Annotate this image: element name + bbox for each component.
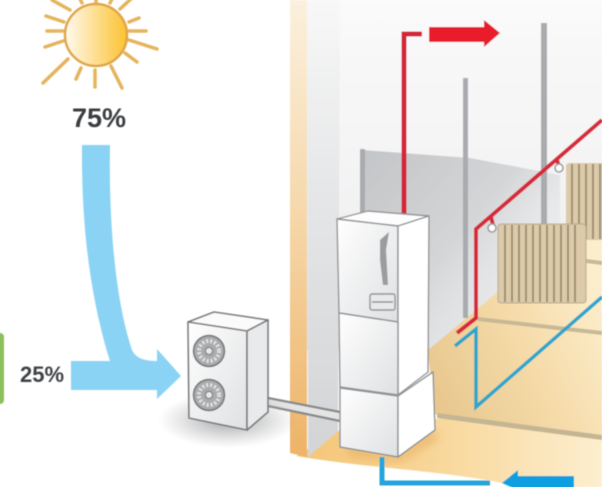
pipe: blue underfloor [382,457,490,483]
icon: sun [43,0,157,88]
indoor unit tank [337,211,435,457]
pipes: blue return loop [455,297,602,407]
label: 75%: 75% [72,103,126,133]
arrow: blue inflow [502,470,574,487]
upper floor room [428,205,602,437]
arrow: red outflow [429,20,500,47]
wall shadow [362,150,560,350]
pipes: connection to outdoor unit [268,398,340,421]
vertical wall posts [360,23,547,318]
back wall [307,0,602,350]
control panel [370,294,395,310]
pipe: red riser [404,34,422,215]
lower floor [296,400,602,487]
wall: exterior section [290,0,307,457]
arrow: light blue merged arrow [71,145,181,399]
wall: side face [307,0,340,457]
radiator valves [488,164,563,232]
radiator: upper [566,163,602,240]
floor shadow under tank [345,430,440,462]
radiator: lower [498,224,586,303]
outdoor unit [158,312,298,448]
fan: upper [194,336,224,366]
pipes: red heating loop [457,120,602,333]
label: 25%: 25% [20,362,64,387]
panel edge: green box [0,333,4,404]
hanging handle [380,232,389,285]
beams [478,317,602,335]
fan: lower [194,380,224,410]
panel: house cutaway [268,0,602,487]
